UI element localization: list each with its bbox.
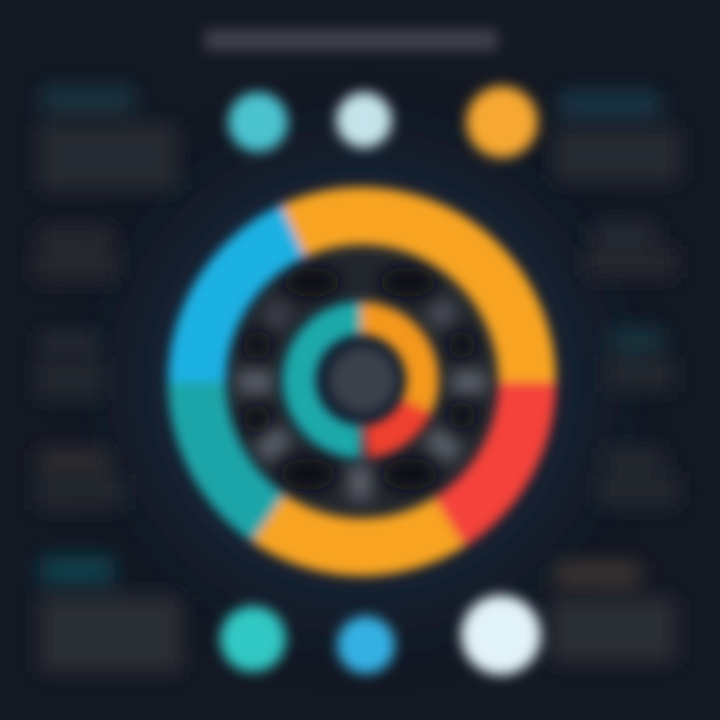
- segment: blue: [197, 231, 293, 382]
- segment: inner orange: [361, 318, 423, 406]
- outer donut chart: [197, 216, 527, 547]
- segment: top orange: [293, 216, 527, 382]
- segment: bottom orange: [268, 518, 449, 547]
- icon: bottom teal circle: [220, 606, 286, 672]
- spokes between rings: [238, 304, 486, 500]
- ring gap band: [254, 273, 470, 489]
- panel: left text 3: [36, 450, 124, 510]
- panel: left text 2: [36, 332, 104, 400]
- panel: bottom right text: [550, 562, 676, 662]
- inner donut chart: [299, 318, 423, 442]
- panel: top left text: [38, 86, 178, 190]
- segment: teal: [197, 382, 268, 518]
- icon: bottom white circle: [461, 595, 541, 675]
- segment: red: [449, 382, 527, 522]
- segment: inner red: [366, 406, 417, 442]
- panel: right text 3: [598, 448, 678, 508]
- panel: left text 1: [34, 228, 118, 282]
- panel: right text 2: [606, 328, 674, 392]
- ring glow: [128, 147, 598, 617]
- icon: top orange circle: [466, 86, 538, 158]
- segment: inner teal: [299, 318, 361, 442]
- panel: right text 1: [586, 222, 676, 278]
- dark gaps between spokes: [243, 267, 476, 490]
- icon: top pale circle: [336, 92, 392, 148]
- center circle: [330, 347, 396, 413]
- icon: bottom blue circle: [337, 616, 395, 674]
- title: [204, 29, 498, 51]
- panel: top right text: [554, 92, 680, 182]
- icon: top teal circle: [228, 92, 288, 152]
- panel: bottom left text: [40, 556, 182, 672]
